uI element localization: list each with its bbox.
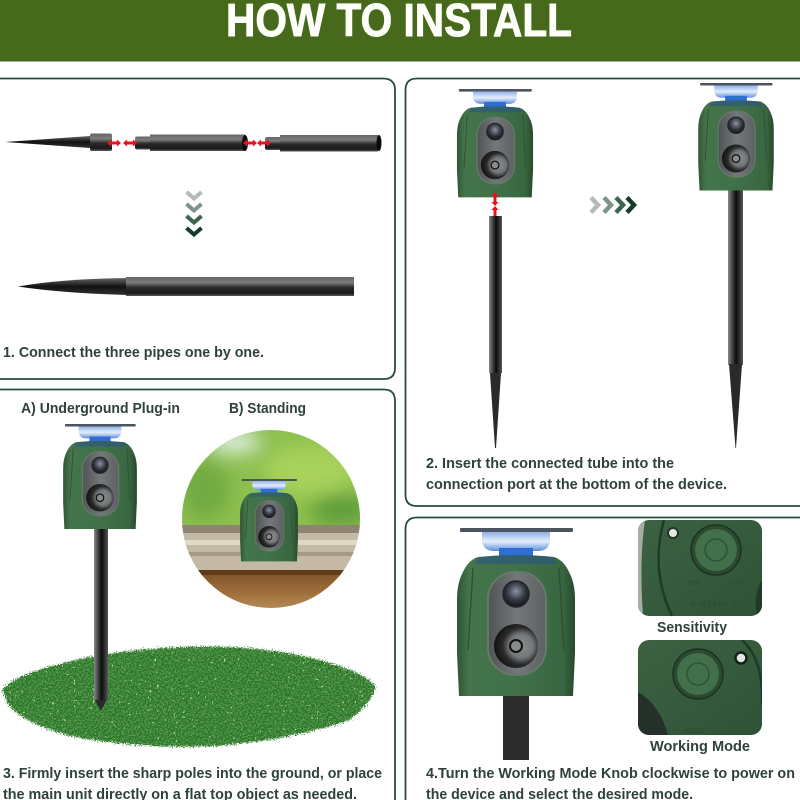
option B label: B) Standing [229,400,306,417]
sensitivity inset: MAX [729,580,744,587]
red connection arrows [107,140,271,146]
sensitivity inset: MIN [688,580,701,587]
panel 2: insert tube [406,78,800,506]
panel 1: connect pipes [0,78,395,379]
step 2 caption: 2. Insert the connected tube into the [426,455,674,472]
device assembled [698,83,774,191]
device on pole [63,424,137,529]
working mode inset: MODE [685,728,706,735]
step 4 caption: 4.Turn the Working Mode Knob clockwise to power on [426,765,795,782]
working mode label: Working Mode [650,738,750,755]
step 4 caption [426,765,795,800]
down chevrons [186,192,202,234]
pole in ground [94,528,108,710]
device before connection [457,89,533,197]
assembled tube [728,190,743,448]
sensitivity inset [638,520,762,616]
right chevrons [591,198,634,212]
assembled pipe [18,277,354,296]
option A label: A) Underground Plug-in [21,400,180,417]
header banner [0,0,800,62]
standing photo circle [180,428,370,609]
device on flat top [240,479,298,561]
panel 3: placement options [0,390,395,800]
sensitivity inset: DISTANCE [691,601,737,608]
device pole [503,696,529,760]
panel 4: power and mode [406,518,800,800]
step 2 caption: connection port at the bottom of the device. [426,476,727,493]
working mode inset [638,640,762,735]
device large [457,528,575,696]
loose tube with spike [489,216,502,448]
separated pipe sections [5,134,382,152]
grass patch [2,647,376,747]
sensitivity label: Sensitivity [657,619,728,636]
step 2 caption [426,455,727,493]
step 3 caption [3,765,382,800]
step 1 caption: 1. Connect the three pipes one by one. [3,344,264,361]
step 3 caption: 3. Firmly insert the sharp poles into the ground, or place [3,765,382,782]
red connection arrows [492,192,498,220]
